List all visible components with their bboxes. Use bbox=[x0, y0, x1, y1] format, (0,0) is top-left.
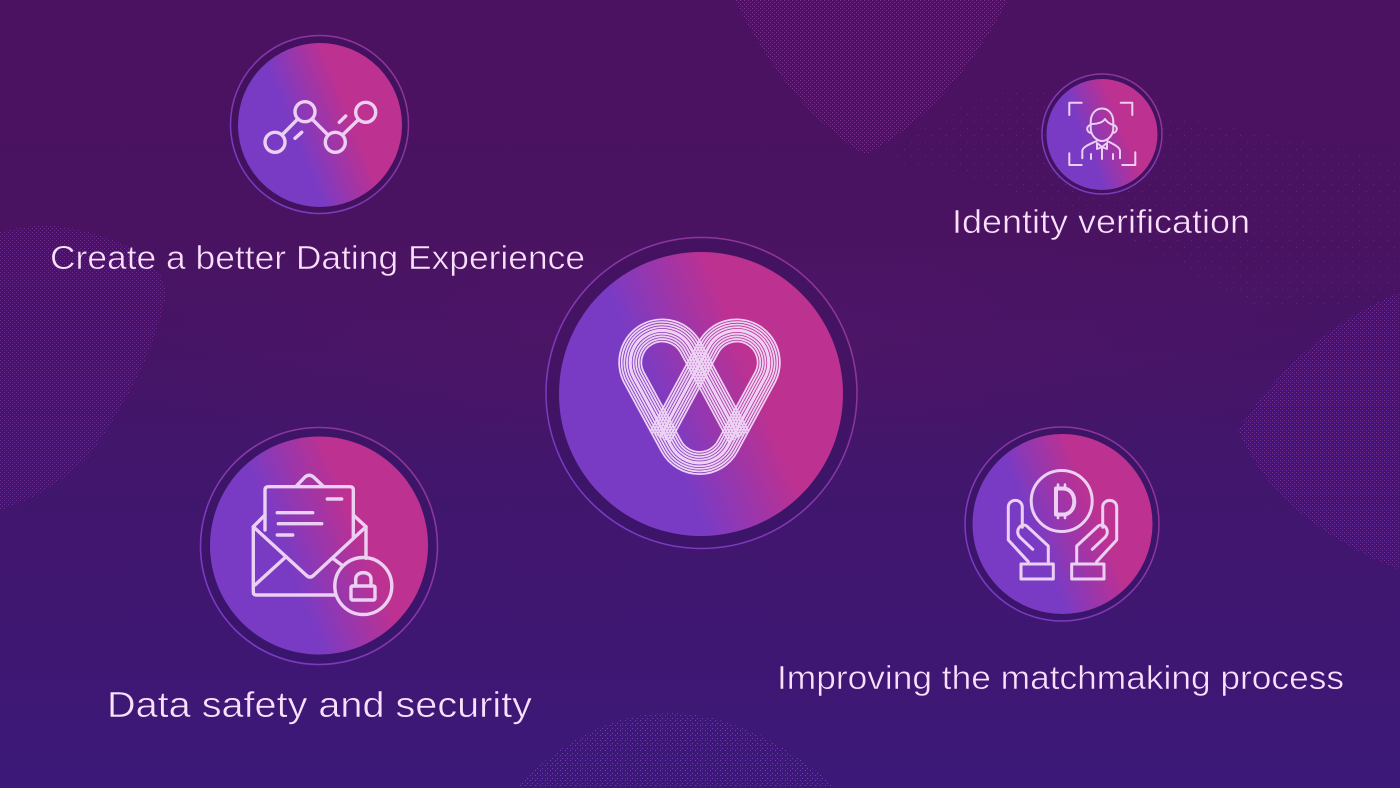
panel: identity verification bbox=[952, 74, 1250, 240]
icon disc: hands holding coin bbox=[965, 427, 1159, 621]
icon disc: locked envelope bbox=[200, 428, 438, 664]
panel: improving the matchmaking process bbox=[777, 427, 1344, 696]
label: create a better dating experience: Create a better Dating Experience bbox=[50, 239, 585, 276]
panel: central logo bbox=[546, 238, 857, 548]
icon: interlaced heart logo bbox=[618, 318, 781, 475]
label: data safety and security: Data safety and security bbox=[107, 684, 532, 725]
label: identity verification: Identity verification bbox=[952, 203, 1250, 240]
label: improving the matchmaking process: Improving the matchmaking process bbox=[777, 659, 1344, 696]
icon disc: line chart bbox=[230, 36, 408, 214]
icon disc: identity scan bbox=[1042, 74, 1162, 194]
panel: create a better dating experience bbox=[50, 36, 585, 276]
panel: data safety and security bbox=[107, 428, 532, 725]
